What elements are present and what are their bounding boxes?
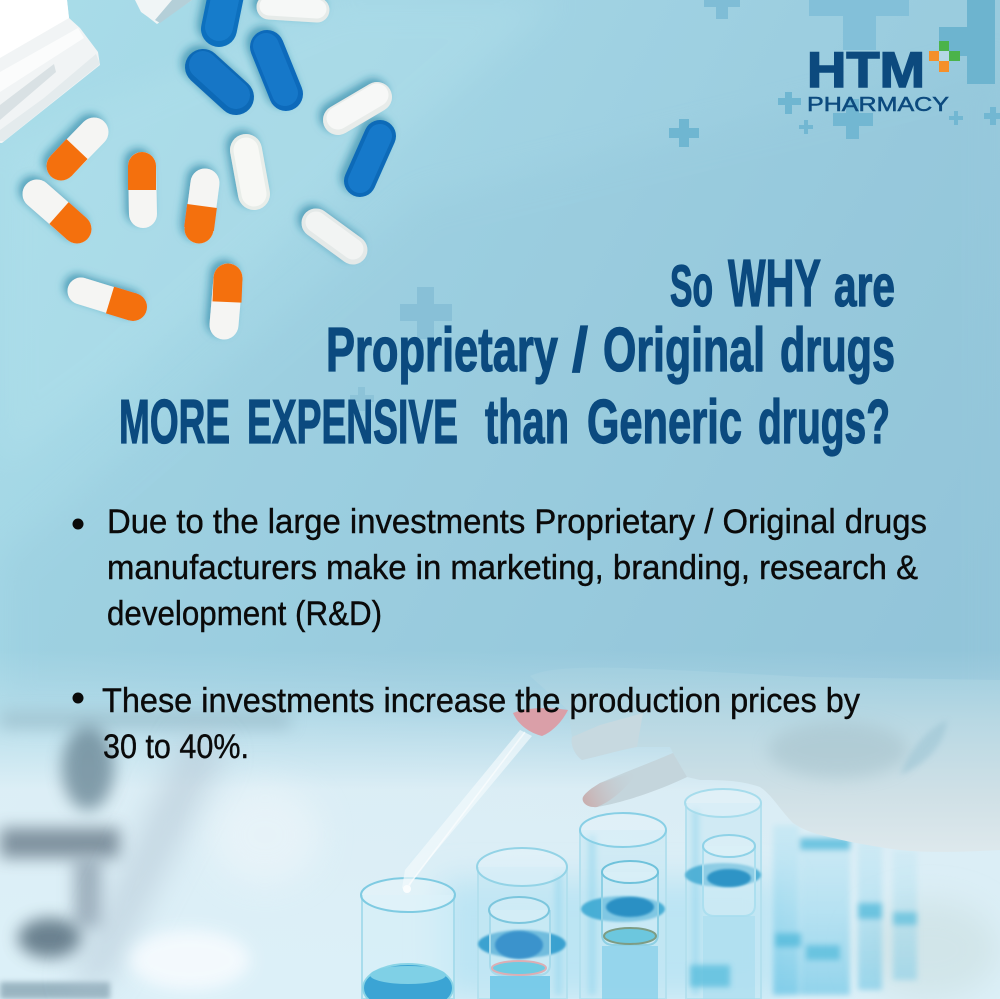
sleeve fold <box>900 720 947 775</box>
bullet dot <box>72 692 84 704</box>
lower finger tint <box>583 753 687 807</box>
heading: Proprietary <box>326 316 558 385</box>
pill: blue right <box>360 136 380 181</box>
gloved hand <box>513 668 1000 852</box>
pill: orange and white 3 <box>184 183 214 244</box>
pill: blue centre <box>266 46 286 94</box>
heading: So <box>670 254 713 319</box>
bullet text: production prices: These investments increase the production prices by <box>102 682 860 720</box>
capsule pills <box>37 0 380 325</box>
pill: orange and white 1 <box>46 132 94 180</box>
hand silhouette with fingers <box>530 668 1000 852</box>
heading: drugs <box>780 316 895 385</box>
bullet text: investments <box>72 503 927 633</box>
pipette bulb <box>513 708 568 736</box>
heading: Generic <box>587 388 742 457</box>
pill: blue top <box>219 0 229 29</box>
upper finger tint <box>572 713 643 760</box>
fingertip tint <box>583 770 640 807</box>
bullet text: production prices <box>72 682 860 766</box>
pill: orange and white 5 <box>81 291 147 321</box>
pill: blue left <box>203 65 236 97</box>
medicine bottle: left <box>0 0 100 143</box>
heading: Original <box>603 316 765 385</box>
bullet text: investments: manufacturers make in marketing, branding, research & <box>107 549 918 587</box>
pill: white lower right <box>316 222 353 250</box>
decorative plus marks <box>350 0 1000 411</box>
logo wordmark: HTM <box>807 42 925 98</box>
logo: HTM Pharmacy <box>807 41 960 116</box>
heading: WHY <box>728 246 821 321</box>
heading: MORE <box>119 388 230 457</box>
medicine bottle: top <box>135 0 192 24</box>
pill: orange and white 4 <box>37 194 92 244</box>
pill: orange and white 6 <box>214 264 242 325</box>
heading: than <box>485 388 569 457</box>
heading: are <box>834 254 895 319</box>
pill: orange and white 2 <box>128 152 156 214</box>
pill: white right <box>338 95 377 120</box>
pill: white centre <box>246 150 254 194</box>
bullet text: production prices: 30 to 40%. <box>103 728 249 766</box>
logo cross <box>929 41 960 72</box>
bullet text: investments: Due to the large investments Proprietary / Original drugs <box>107 503 927 541</box>
tube 3 <box>580 813 666 999</box>
test tube backdrop glow <box>440 880 1000 999</box>
logo subtitle: PHARMACY <box>807 94 949 116</box>
blurred rear test tubes <box>773 825 917 995</box>
tube 1 with blue liquid <box>361 878 455 999</box>
tube 2 <box>477 848 567 999</box>
blurred microscope background <box>0 712 320 999</box>
bullet dot <box>72 518 84 530</box>
tube 4 <box>685 789 761 999</box>
heading: EXPENSIVE <box>247 388 458 457</box>
bullet text: investments: development (R&D) <box>107 595 382 633</box>
palm shading <box>768 722 908 778</box>
heading: / <box>572 316 588 385</box>
pipette <box>402 730 532 893</box>
test tubes <box>361 789 761 999</box>
pill: white top <box>269 6 317 10</box>
heading <box>119 246 895 457</box>
heading: drugs? <box>758 388 890 457</box>
